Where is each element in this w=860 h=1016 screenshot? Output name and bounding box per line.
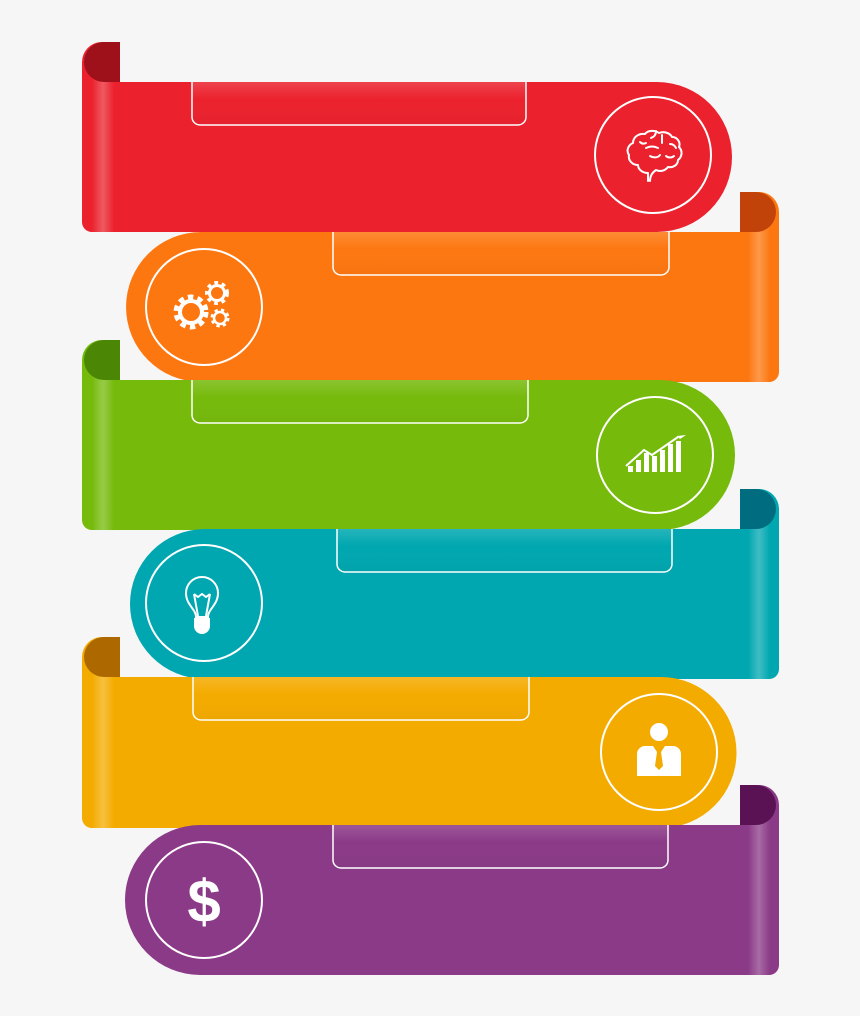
icon: businessman [601,694,717,810]
tab box [333,232,669,275]
tab box [333,825,668,868]
ribbon 3: green [82,340,735,530]
icon: dollar: $ [187,868,221,935]
icon: brain [595,97,711,213]
icon: gears [146,249,262,365]
icon: growth chart [597,397,713,513]
ribbon 2: orange [126,192,779,382]
icon: dollar [146,842,262,958]
tab box [192,380,528,423]
ribbon 4: teal [130,489,779,679]
tab box [193,677,529,720]
ribbon 6: purple [125,785,779,975]
icon: light bulb [146,545,262,661]
ribbon 5: yellow [82,637,736,828]
tab box [192,82,526,125]
tab box [337,529,672,572]
ribbon 1: red [82,42,732,232]
